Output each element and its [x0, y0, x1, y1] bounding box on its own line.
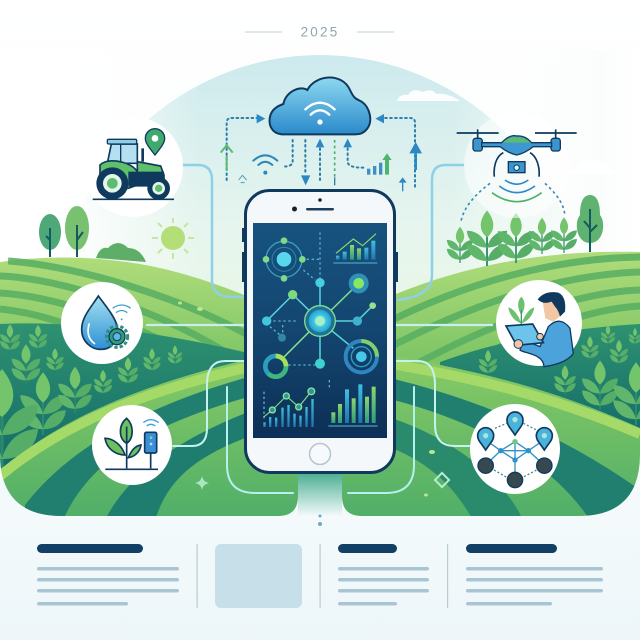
sky dome: [49, 55, 591, 340]
field furrows left: [0, 258, 244, 348]
right field panel: [340, 252, 640, 520]
phone: [242, 190, 398, 472]
front hill left: [1, 362, 298, 516]
nodes: [315, 278, 325, 287]
divider 2: [320, 544, 321, 608]
crop plants right: [479, 325, 640, 425]
field furrows right: [380, 257, 640, 362]
small arrow: [239, 175, 247, 183]
dashboard: [262, 232, 378, 427]
front hill highlight right: [396, 360, 640, 438]
small sparkles: [178, 302, 435, 496]
diamond right: [435, 473, 449, 487]
text block 2: [338, 544, 429, 606]
dark furrow 1 left: [25, 378, 244, 516]
icon: drone: [457, 129, 577, 223]
small cloud near drone: [560, 160, 615, 174]
icon: tractor with pin: [93, 129, 174, 200]
dotted lines: [264, 232, 329, 418]
front hill highlight left: [1, 363, 244, 480]
donut left: [265, 356, 286, 377]
dotted links: [227, 118, 415, 187]
camera: [508, 162, 525, 173]
icon: water drop with gear: [82, 296, 131, 349]
left field panel: [0, 257, 300, 520]
small cloud right: [397, 90, 460, 101]
sun: [152, 218, 194, 259]
water icon circle: [61, 282, 143, 364]
small cloud left: [30, 160, 100, 174]
drone light circle: [464, 112, 570, 218]
bush: [96, 243, 146, 262]
ground nodes: [478, 458, 552, 488]
data arrows and cloud: [221, 77, 422, 191]
plant sensor circle: [92, 405, 172, 485]
legs: [494, 153, 539, 177]
cloud wifi: [305, 103, 335, 125]
sparkle left: [195, 476, 209, 490]
donut right: [346, 341, 377, 372]
person circle: [496, 280, 582, 366]
lower-right bar chart: [328, 384, 378, 426]
lower-left line chart: [263, 388, 315, 427]
waves: [492, 180, 542, 202]
phone base glow: [298, 470, 342, 516]
dark furrow 1 right: [396, 380, 634, 516]
signal bars with arrow: [367, 153, 392, 175]
dark plant field left: [0, 323, 244, 470]
body: [482, 136, 552, 155]
top bar chart: [333, 234, 377, 263]
back hill left: [0, 258, 244, 352]
wifi icon: [253, 155, 277, 175]
network circle: [470, 404, 560, 494]
dark furrow 2 right: [396, 420, 521, 516]
dark furrow 2 left: [107, 414, 244, 516]
network lines: [267, 283, 373, 362]
arrowheads: [257, 114, 422, 191]
divider 3: [447, 544, 448, 608]
cloud: [270, 77, 370, 134]
central hub: [305, 306, 335, 336]
back hill right: [396, 252, 640, 365]
scan dotted lines: [461, 183, 565, 223]
left trees: [39, 206, 89, 257]
crop plants left: [0, 324, 182, 468]
front hill right: [340, 348, 640, 520]
divider 1: [196, 544, 198, 608]
icon: person with tablet: [506, 292, 573, 367]
dark plant field right: [440, 324, 640, 428]
header: year: 2025: [301, 24, 339, 40]
rotors: [457, 129, 577, 140]
drone plants: [447, 211, 577, 266]
image placeholder: [215, 544, 302, 608]
green arrow left: [221, 145, 233, 171]
text block 1: [37, 544, 179, 606]
top-left orbit node: [263, 237, 306, 282]
tractor icon circle: [83, 117, 183, 217]
base dots: [318, 514, 322, 526]
pins: [478, 412, 552, 450]
right tree: [577, 195, 603, 252]
left haze: [0, 50, 200, 320]
icon: location network: [478, 412, 552, 488]
connector lines: [147, 165, 492, 493]
side buttons: [242, 228, 398, 282]
green dotted link: [332, 140, 337, 177]
text block 3: [466, 544, 603, 606]
right haze: [450, 50, 640, 320]
icon: plant sensor: [105, 418, 159, 469]
screen: [253, 223, 387, 438]
